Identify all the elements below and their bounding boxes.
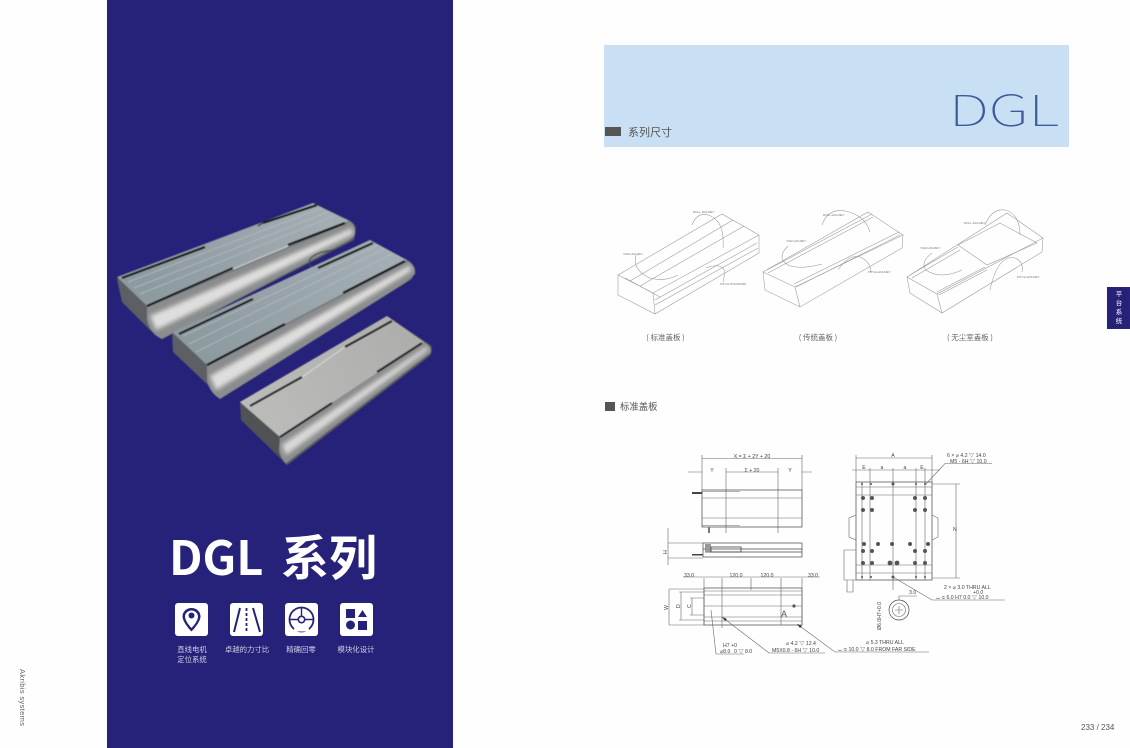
view: side: H: [663, 550, 669, 554]
drawing: standard cover: YAW-HOLMEY: [623, 252, 643, 256]
view: bottom: 33.0: [684, 573, 694, 579]
detail: counterbore circle: 3.0: [909, 590, 916, 596]
technical drawing: end view: [844, 452, 1005, 630]
dimension: width A and spacing: E: [920, 465, 924, 471]
caption: cleanroom cover: ( 无尘室盖板 ): [947, 332, 993, 343]
drawing: cleanroom cover: ROLL-HOLMEY: [964, 221, 986, 225]
detail: counterbore circle: [877, 590, 917, 630]
caption: traditional cover: ( 传统盖板 ): [799, 332, 837, 343]
dimension: width A and spacing: [852, 453, 940, 590]
view: top: [692, 490, 802, 533]
product: large stage: [117, 203, 356, 339]
drawing: cleanroom cover: PITCH-HOLMEY: [1017, 275, 1040, 279]
dimension: width A and spacing: a: [904, 465, 907, 471]
tab: platform systems: 统: [1116, 315, 1123, 325]
tab: platform systems: 系: [1116, 306, 1123, 316]
feature label: linear motor positioning: 直线电机: [177, 644, 207, 655]
callout: through hole: ⌴ ⌀ 10.0 ▽ 8.0 FROM FAR SIDE: [838, 646, 916, 653]
icon: road: [230, 603, 263, 636]
section heading: series dimensions: 系列尺寸: [628, 124, 672, 140]
view: bottom: 120.0: [761, 573, 774, 579]
icon: steering wheel: [285, 603, 318, 636]
page number: 233 / 234: [1081, 723, 1115, 732]
drawing: standard cover: ROLL-HOLMEY: [693, 210, 715, 214]
panel: blue product cover: [107, 0, 453, 748]
callout: threaded hole: M5X0.8 - 6H ▽ 10.0: [772, 647, 819, 654]
view: plate with mounting holes: [844, 482, 938, 592]
view: bottom: [664, 573, 820, 628]
dimension: overall length: Y: [788, 468, 792, 474]
callout: dowel through hole: +0.0: [973, 590, 983, 596]
dimension: width A and spacing: A: [891, 453, 895, 459]
dimension: length N: N: [953, 527, 957, 533]
section heading: standard cover: 标准盖板: [620, 399, 658, 413]
product photo: three DGL linear stages: [117, 203, 432, 465]
header band: [604, 45, 1069, 147]
product: middle stage: [172, 240, 415, 399]
dimension: overall length: [688, 454, 812, 533]
callout: mounting thread: 6 × ⌀ 4.2 ▽ 14.0: [947, 452, 986, 459]
callout: dowel hole: 0 ▽ 8.0: [734, 648, 752, 655]
tab: platform systems: 平: [1116, 288, 1123, 298]
callout: mounting thread: M5 - 6H ▽ 10.0: [950, 458, 987, 465]
dimension: length N: [932, 484, 960, 578]
view: side: [663, 528, 802, 565]
feature label: modular design: 模块化设计: [338, 644, 375, 655]
product: small stage: [240, 316, 432, 465]
drawing: cleanroom cover: [907, 210, 1043, 313]
feature label: linear motor positioning: 定位系统: [177, 654, 207, 665]
header model name: DGL: [949, 77, 1059, 139]
tab: platform systems: [1107, 287, 1130, 329]
view: bottom: C: [687, 604, 693, 608]
view: bottom: 120.0: [730, 573, 743, 579]
drawing: traditional cover: PITCH-HOLMEY: [868, 270, 891, 274]
callout: dowel hole: H7 +0: [723, 643, 737, 649]
dimension: overall length: X = Σ + 2Y + 20: [734, 454, 770, 460]
callout: mounting thread: [925, 452, 992, 485]
callout: threaded hole: ⌀ 4.2 ▽ 12.4: [786, 640, 816, 647]
drawing: standard cover: [618, 210, 759, 314]
view: bottom: W: [664, 605, 670, 610]
dimension: width A and spacing: E: [862, 465, 866, 471]
drawing: traditional cover: ROLL-HOLMEY: [823, 213, 845, 217]
drawing: standard cover: PITCH-STANDARD: [720, 282, 747, 286]
feature label: force ratio: 卓越的力寸比: [225, 644, 269, 655]
title: DGL: [169, 520, 263, 589]
icon: location pin: [175, 603, 208, 636]
detail: counterbore circle: Ø6.0H7+0.0: [877, 602, 883, 630]
icon: modules: [340, 603, 373, 636]
drawing: traditional cover: YAW-HOLMEY: [786, 239, 806, 243]
callout: threaded hole: [722, 617, 825, 654]
dimension: width A and spacing: a: [881, 465, 884, 471]
dimension: overall length: Y: [710, 468, 714, 474]
view: bottom: D: [676, 604, 682, 608]
dimension: overall length: Σ + 20: [745, 468, 760, 474]
caption: standard cover: ( 标准盖板 ): [646, 332, 685, 343]
callout: dowel through hole: ⌴ ⌀ 6.0 H7 0.0 ▽ 10.0: [936, 594, 989, 601]
drawing: cleanroom cover: YAW-HOLMEY: [920, 246, 940, 250]
tab: platform systems: 台: [1116, 297, 1122, 307]
section heading: series dimensions: [605, 124, 672, 140]
feature label: precise homing: 精确回零: [286, 644, 316, 655]
callout: dowel through hole: [893, 577, 1005, 601]
brand text: Akribis systems: [18, 669, 27, 726]
callout: through hole: [797, 624, 929, 653]
callout: dowel through hole: 2 × ⌀ 3.0 THRU ALL: [944, 585, 991, 591]
view: bottom: A: [781, 609, 787, 619]
view: bottom: 33.0: [808, 573, 818, 579]
callout: dowel hole: [711, 610, 752, 655]
drawing: traditional cover: [763, 211, 903, 307]
callout: dowel hole: ⌀8.0: [720, 649, 730, 655]
technical drawing: top, side and bottom views: [663, 454, 929, 655]
callout: through hole: ⌀ 5.3 THRU ALL: [866, 640, 904, 646]
title: 系列: [281, 519, 377, 589]
